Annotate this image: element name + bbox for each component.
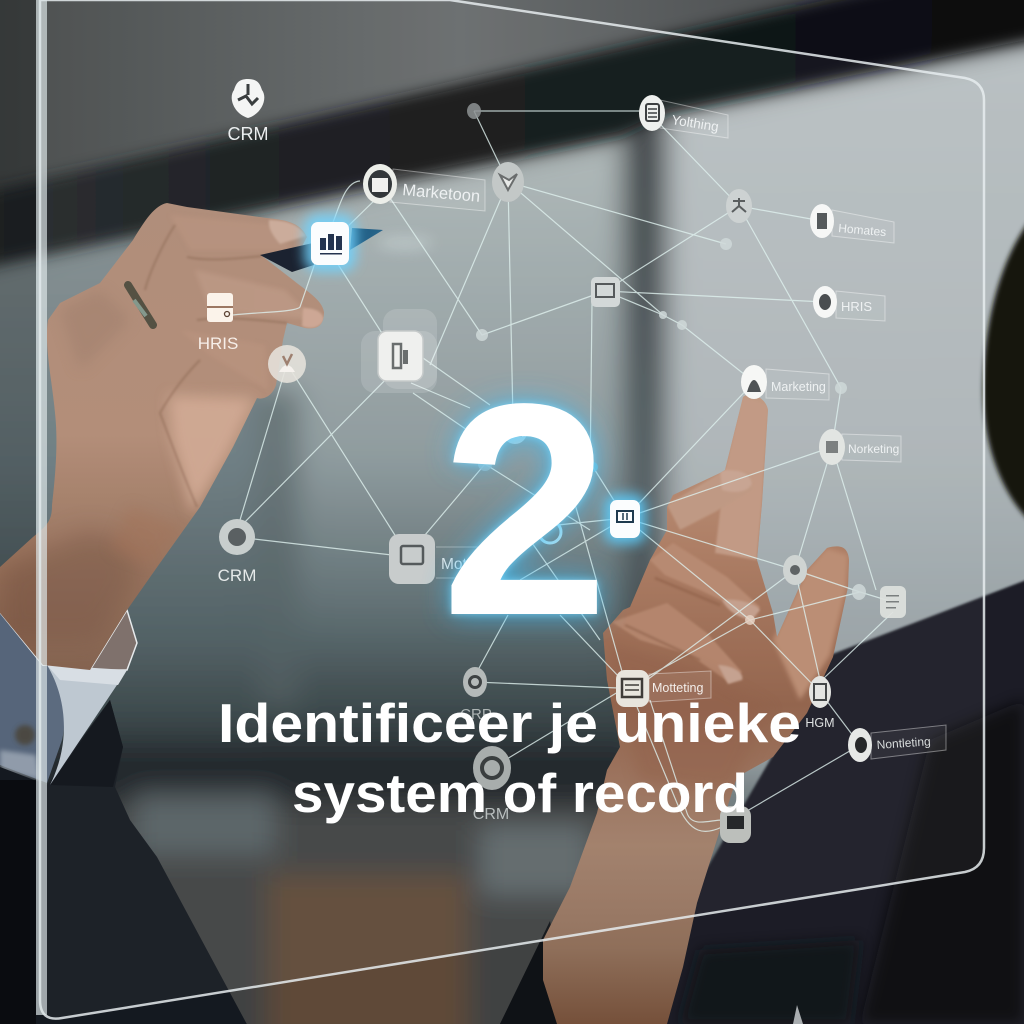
node: Marketoon: Marketoon [402,181,481,206]
node: Homates: Homates [838,221,887,239]
node: bottom icon near wrist [720,806,751,843]
big glowing number 2: 2 [441,341,609,678]
node: Motteting on hand: Motteting [652,681,703,695]
small badges behind the number [503,420,561,543]
node: HRIS left: HRIS [198,334,238,353]
node: gear bottom CRM [473,746,511,823]
node: Marketing with person icon: Marketing [771,380,826,394]
stylus [260,228,433,272]
left suit jacket [0,700,250,1024]
node: gear bottom CRM: CRM [473,806,509,823]
title [218,692,801,824]
node: CRM gear left [218,519,256,585]
node: CRM top left: CRM [228,124,268,144]
big glowing number 2: 2 [441,341,609,678]
node: Nontleting: Nontleting [876,734,931,752]
shirt cuff [0,610,137,785]
node: Yolthing: Yolthing [671,112,720,134]
left sleeve with cufflink [0,613,64,783]
node: gear lower centre [460,667,492,723]
node: Norketing: Norketing [848,442,899,456]
title: Identificeer je unieke [218,692,801,754]
node: HRIS right: HRIS [841,299,872,314]
big glowing number 2: 2 [441,341,609,678]
node: Marketoon [363,164,485,211]
node: active glowing centre icon [604,494,646,544]
node: document right [880,586,906,618]
node: tool badge left [268,345,306,383]
node: HRIS left [198,293,238,353]
node: active chart icon on stylus [304,214,356,272]
node: Marketing with person icon [741,365,829,400]
node: CRM top left [228,79,268,144]
right hand with raised fingers [530,385,860,1024]
node: Motteting on hand [616,670,711,707]
node: Motm card: Motm [441,556,480,573]
node: gear lower centre: CRP [460,706,492,723]
node: HGM: HGM [805,716,835,730]
node: Homates [810,204,894,243]
node: Yolthing [639,95,728,138]
right person: dark jacket [497,577,1024,1024]
left hand holding stylus [0,190,340,680]
network connection lines [233,111,893,831]
node: checkmark badge [492,162,524,202]
node: CRM gear left: CRM [218,566,256,585]
node: Motm card [389,534,500,584]
right person: hair [983,215,1024,525]
title: system of record [292,762,748,824]
node: HRIS right [813,286,885,321]
node: HGM [805,676,835,730]
small network dots [467,103,866,625]
node: screen icon centre top [591,277,620,307]
node: Norketing [819,429,901,465]
wedding ring [128,285,153,325]
node: Nontleting [848,725,946,762]
node: small hand-side badge [783,555,807,585]
node: large document card [361,309,437,393]
node: star badge upper right [726,189,752,223]
